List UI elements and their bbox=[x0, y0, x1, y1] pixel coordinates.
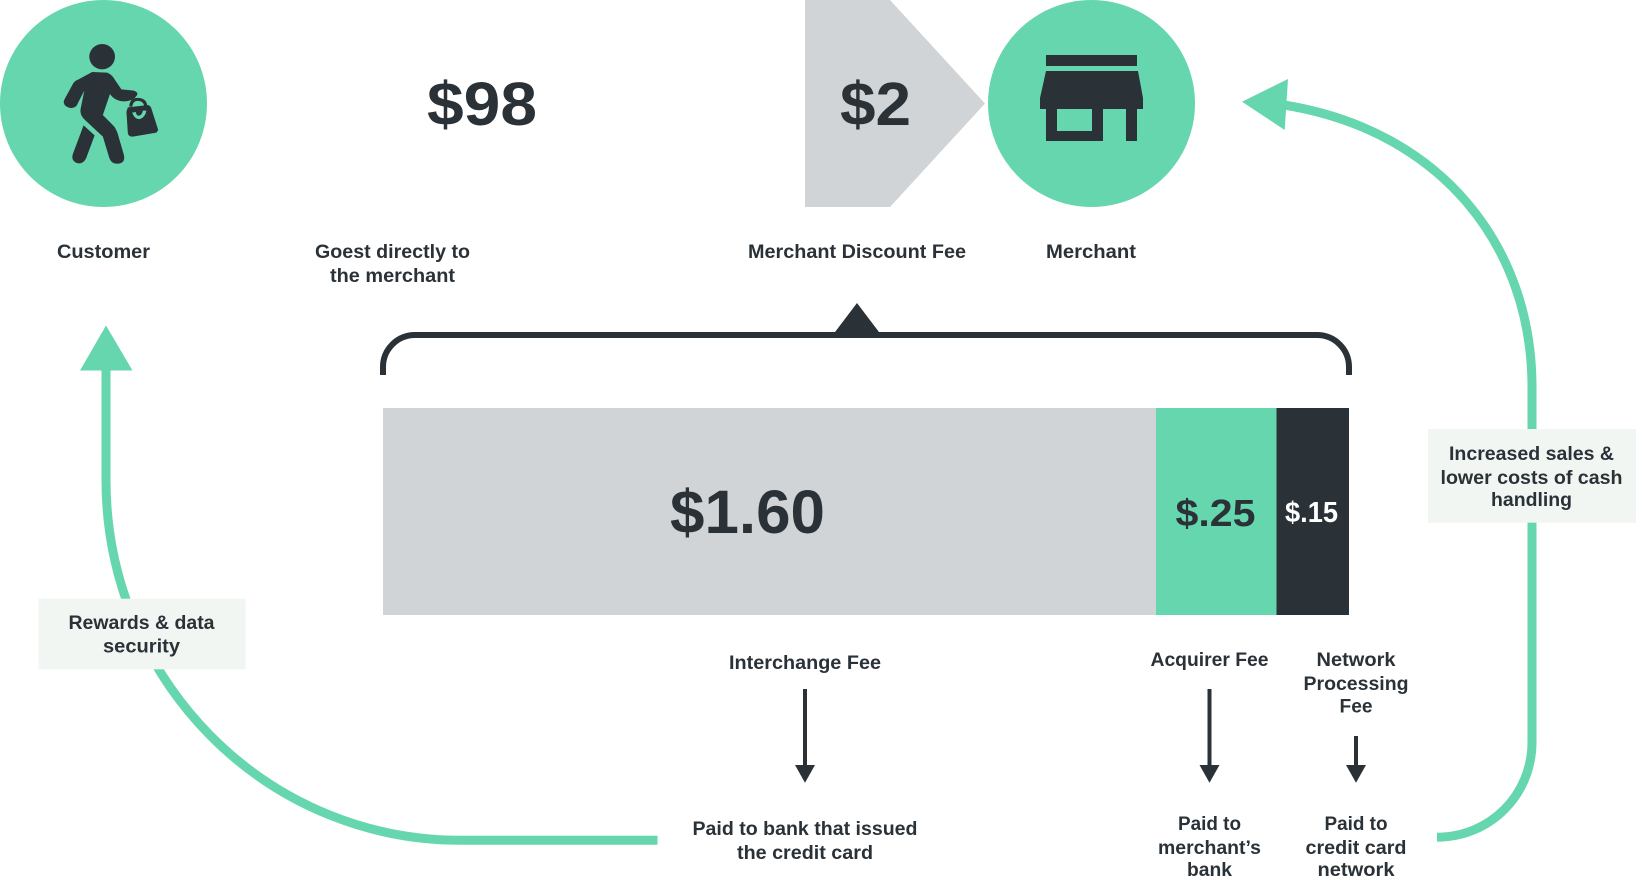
paid to credit card network: Paid to bbox=[1324, 814, 1388, 835]
callout: increased sales: lower costs of cash bbox=[1440, 468, 1622, 489]
callout: increased sales: Increased sales & bbox=[1449, 444, 1614, 465]
goest directly label bbox=[315, 242, 470, 287]
merchant discount fee arrow panel bbox=[805, 0, 985, 207]
arrow: acquirer bbox=[1200, 689, 1220, 783]
customer node bbox=[0, 0, 207, 263]
interchange segment: $1.60 bbox=[670, 478, 825, 546]
network segment bbox=[1276, 408, 1349, 615]
stacked fee bar bbox=[383, 408, 1349, 615]
merchant label: Merchant bbox=[1046, 242, 1137, 263]
paid to merchant's bank: bank bbox=[1187, 860, 1232, 881]
network processing fee label: Processing bbox=[1304, 674, 1408, 695]
network processing fee label: Network bbox=[1316, 650, 1396, 671]
customer label: Customer bbox=[57, 242, 151, 263]
$98 amount: $98 bbox=[427, 70, 537, 138]
merchant node bbox=[988, 0, 1195, 263]
acquirer segment: $.25 bbox=[1176, 493, 1256, 535]
icon: shopper with bag bbox=[64, 44, 158, 164]
$2 amount: $2 bbox=[840, 70, 911, 138]
paid to credit card network: credit card bbox=[1306, 838, 1406, 859]
network segment: $.15 bbox=[1285, 497, 1338, 529]
green arrow: rewards back to customer bbox=[80, 326, 658, 840]
callout: increased sales: handling bbox=[1491, 490, 1572, 511]
interchange segment bbox=[383, 408, 1156, 615]
acquirer fee label: Acquirer Fee bbox=[1150, 650, 1268, 671]
callout: increased sales bbox=[1428, 429, 1636, 523]
paid to issuing bank: the credit card bbox=[737, 843, 873, 864]
acquirer segment bbox=[1156, 408, 1276, 615]
arrow: network bbox=[1346, 736, 1366, 783]
customer circle bbox=[0, 0, 207, 207]
goest directly label: Goest directly to bbox=[315, 242, 470, 263]
callout: rewards and data security: security bbox=[103, 636, 180, 658]
icon: storefront bbox=[1040, 55, 1143, 141]
bracket with pointer bbox=[383, 303, 1349, 375]
network processing fee label bbox=[1304, 650, 1408, 718]
paid to merchant's bank: merchant’s bbox=[1158, 838, 1261, 859]
interchange fee label: Interchange Fee bbox=[729, 653, 881, 674]
arrow: interchange bbox=[795, 689, 815, 783]
callout: rewards and data security: Rewards & data bbox=[68, 613, 215, 634]
network processing fee label: Fee bbox=[1340, 696, 1372, 718]
merchant discount fee label: Merchant Discount Fee bbox=[748, 242, 966, 263]
paid to merchant's bank bbox=[1158, 814, 1261, 881]
paid to merchant's bank: Paid to bbox=[1178, 814, 1241, 835]
paid to credit card network bbox=[1306, 814, 1406, 881]
paid to issuing bank bbox=[692, 819, 918, 864]
paid to credit card network: network bbox=[1318, 860, 1395, 881]
merchant circle bbox=[988, 0, 1195, 207]
goest directly label: the merchant bbox=[330, 266, 456, 287]
callout: rewards and data security bbox=[38, 599, 246, 669]
green arrow: network back to merchant bbox=[1242, 79, 1532, 837]
paid to issuing bank: Paid to bank that issued bbox=[692, 819, 918, 840]
